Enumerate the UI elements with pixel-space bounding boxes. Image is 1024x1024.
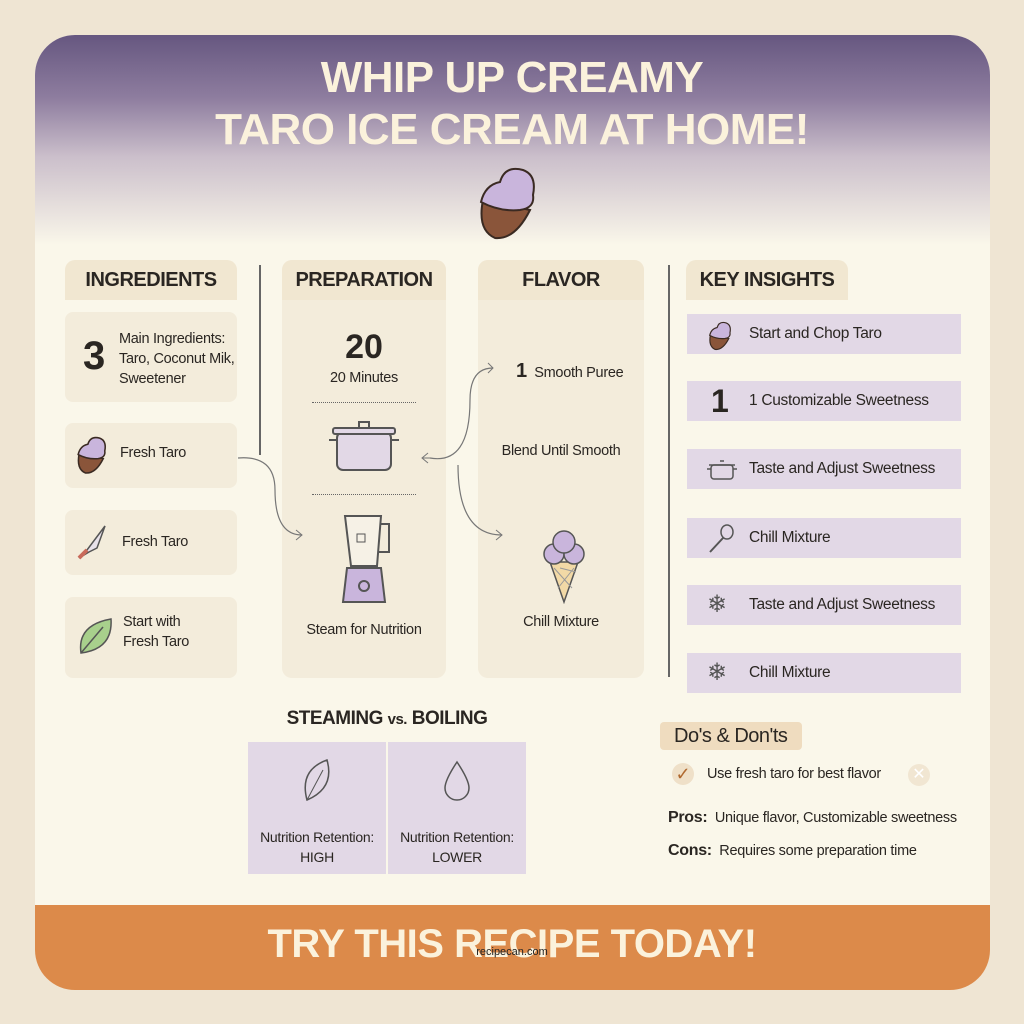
do item: ✓ [675,764,691,784]
row 1: Start and Chop Taro [749,325,882,342]
heading: preparation [282,260,446,300]
heading: preparation: PREPARATION [295,269,433,291]
box: boiling: LOWER [432,849,482,865]
box: main ingredients: Main Ingredients: [119,331,225,347]
row 1 [687,314,961,354]
footer band [35,905,990,990]
box: main ingredients: 3 [83,334,105,378]
heading: flavor: FLAVOR [522,269,600,291]
panel: flavor [478,260,644,678]
footer cta: TRY THIS RECIPE TODAY! [267,922,757,966]
icon: ice cream cone [543,530,585,604]
row 5: ❄ [707,591,727,618]
row 5: Taste and Adjust Sweetness [749,596,935,613]
stat: 20 minutes [330,328,398,386]
row 2: 1 Customizable Sweetness [749,392,929,409]
cons: Cons: Requires some preparation time [668,842,917,859]
panel: preparation [282,260,446,678]
row 6 [687,653,961,693]
heading: ingredients [65,260,237,300]
stat: 20 minutes: 20 [345,328,383,366]
heading: do's and don'ts: Do's & Don'ts [674,725,787,747]
box: steaming: Nutrition Retention: [260,829,374,845]
stat: 20 minutes: 20 Minutes [330,370,398,386]
pros: Pros: Unique flavor, Customizable sweetness [668,809,957,826]
arrows [238,362,503,540]
row 3 [687,449,961,489]
box: leaf: Start with [123,614,180,630]
do item: ✕ [912,766,926,783]
box: knife: Fresh Taro [122,534,188,550]
insight rows [687,314,961,693]
box: main ingredients: Taro, Coconut Mik, [119,351,234,367]
heading: do's and don'ts [660,722,802,750]
row 6: Chill Mixture [749,664,830,681]
heading: ingredients: INGREDIENTS [85,269,217,291]
watermark: recipecan.com [476,946,548,958]
text: steam: Steam for Nutrition [306,622,422,638]
box: knife [65,510,237,575]
icon: blender [342,515,390,603]
heading: STEAMING vs. BOILING [287,708,487,729]
heading: key insights: KEY INSIGHTS [700,269,834,291]
title: WHIP UP CREAMY [321,53,703,102]
text: chill: Chill Mixture [523,614,599,630]
row 2: 1 [711,383,728,419]
box: main ingredients: Sweetener [119,371,186,387]
row 5 [687,585,961,625]
section: steaming vs boiling [248,708,526,874]
row 6: ❄ [707,659,727,686]
box: fresh taro [65,423,237,488]
text: blend: Blend Until Smooth [502,443,620,459]
row 4 [687,518,961,558]
icon: pot [329,421,399,471]
box: boiling [388,742,526,874]
box: boiling: Nutrition Retention: [400,829,514,845]
do item [672,763,930,786]
heading: flavor [478,260,644,300]
do item: Use fresh taro for best flavor [707,766,881,782]
box: fresh taro: Fresh Taro [120,445,186,461]
title: TARO ICE CREAM AT HOME! [215,105,809,154]
title [215,53,809,154]
box: steaming: HIGH [300,849,334,865]
box: steaming [248,742,386,874]
row 4: Chill Mixture [749,529,830,546]
panel: ingredients [65,260,237,678]
icon: taro ice cream [480,168,535,240]
text: smooth puree: 1 Smooth Puree [516,360,623,382]
row 3: Taste and Adjust Sweetness [749,460,935,477]
heading: key insights [686,260,848,300]
box: leaf [65,597,237,678]
box: main ingredients [65,312,237,402]
row 2 [687,381,961,421]
box: leaf: Fresh Taro [123,634,189,650]
